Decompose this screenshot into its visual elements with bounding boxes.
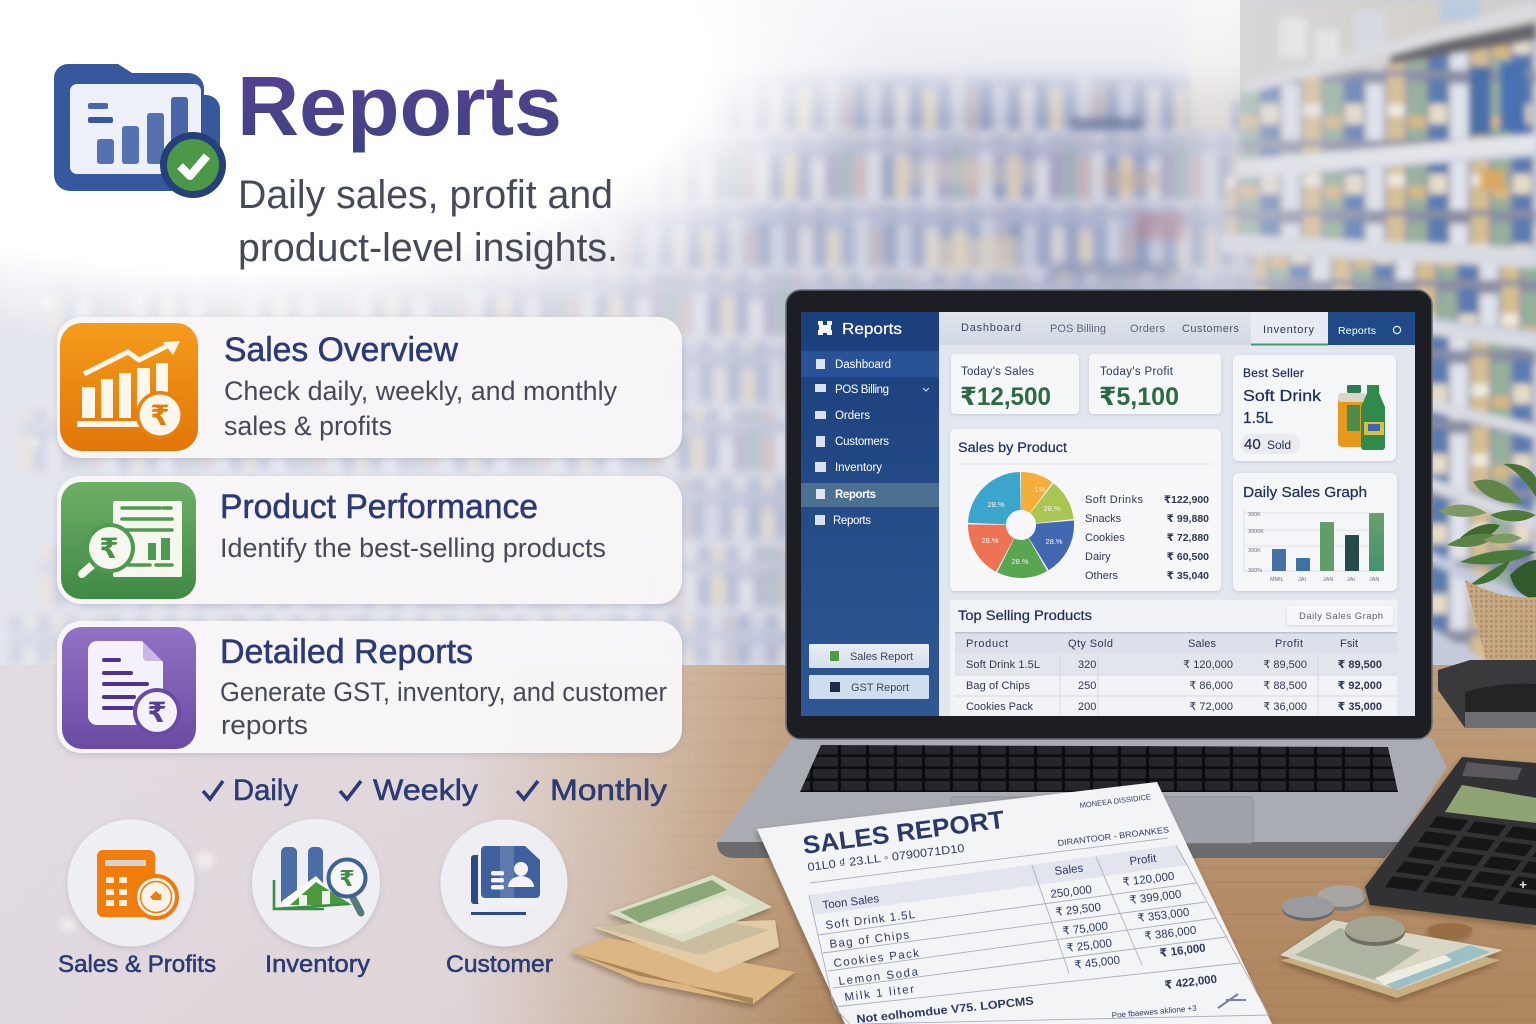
panel: product performance: Product Performance: [220, 488, 538, 526]
sidebar: Reports: [833, 515, 871, 527]
sales by product card: Soft Drinks: [1085, 494, 1144, 506]
sales report paper: Poe fbaewes aklione +3: [1111, 1004, 1198, 1020]
best seller card: Soft Drink: [1243, 388, 1321, 405]
top selling products table: ₹ 92,000: [1338, 680, 1382, 692]
daily sales graph card: 3000K: [1248, 529, 1264, 535]
top selling products table: ₹ 89,500: [1338, 659, 1382, 671]
panel: sales overview: [57, 317, 682, 458]
best seller card: Sold: [1267, 438, 1291, 452]
top selling products table: Daily Sales Graph: [1299, 611, 1383, 622]
banknotes right: [1280, 916, 1503, 998]
sales report paper: [757, 782, 1272, 1024]
panel: detailed reports: [57, 621, 682, 753]
sidebar: Inventory: [835, 462, 882, 474]
sales by product card: [950, 429, 1221, 591]
sales by product card: ₹ 60,500: [1167, 551, 1209, 563]
laptop base and keyboard: [717, 738, 1447, 858]
top navigation: Customers: [1182, 323, 1240, 335]
top selling products table: ₹ 120,000: [1183, 659, 1233, 671]
sales by product card: ₹ 35,040: [1167, 570, 1209, 582]
pie chart: 28.%: [1045, 537, 1063, 546]
subtitle: Daily sales, profit and: [238, 173, 613, 217]
sidebar: POS Billing: [835, 384, 889, 396]
sidebar: Orders: [835, 410, 870, 422]
top selling products table: Sales: [1188, 638, 1216, 650]
stat card: today's profit: ₹5,100: [1099, 383, 1179, 411]
sales by product card: Sales by Product: [958, 440, 1067, 455]
sales report paper: Profit: [1129, 853, 1158, 868]
sales report paper: Cookies Pack: [833, 948, 920, 970]
sales report paper: MONEEA DISSIDICE: [1079, 792, 1151, 810]
sales by product card: ₹122,900: [1164, 494, 1209, 506]
panel: detailed reports: reports: [221, 710, 308, 740]
panel: product performance: [57, 476, 682, 604]
calculator: +: [1519, 877, 1527, 892]
title: Reports: [237, 59, 562, 153]
sales report paper: Lemon Soda: [838, 966, 919, 988]
best seller card: [1233, 355, 1396, 461]
sales report paper: ₹ 16,000: [1159, 942, 1206, 960]
sales report paper: ₹ 386,000: [1144, 925, 1197, 943]
category: inventory: [252, 819, 380, 978]
pie chart: 28.%: [1043, 504, 1061, 513]
sales report paper: ₹ 45,000: [1074, 954, 1121, 972]
top selling products table: Qty Sold: [1068, 638, 1113, 650]
top selling products table: ₹ 72,000: [1189, 701, 1233, 713]
sales report paper: SALES REPORT: [801, 806, 1006, 860]
top selling products table: 320: [1078, 659, 1096, 671]
sales report paper: Milk 1 liter: [844, 984, 915, 1004]
banknotes left: [570, 875, 795, 1004]
stat card: today's sales: Today's Sales: [961, 366, 1034, 378]
potted plant: [1438, 464, 1536, 660]
category: customer: Customer: [446, 951, 553, 978]
sidebar: Reports: [842, 321, 902, 338]
coins: [1282, 885, 1366, 921]
top selling products table: Product: [966, 638, 1008, 650]
category: sales and profits: [58, 820, 216, 978]
pie chart: 1%: [1035, 485, 1046, 494]
period checklist: daily, weekly, monthly: Monthly: [550, 774, 667, 807]
top selling products table: ₹ 36,000: [1263, 701, 1307, 713]
sales report paper: ₹ 29,500: [1055, 901, 1102, 919]
period checklist: daily, weekly, monthly: Weekly: [373, 774, 478, 807]
top navigation: Orders: [1130, 323, 1166, 335]
sales report paper: ₹ 399,000: [1129, 889, 1182, 907]
pie chart: 28.%: [1011, 557, 1029, 566]
sidebar: [801, 312, 939, 716]
top selling products table: ₹ 86,000: [1189, 680, 1233, 692]
icon: document with rupee: ₹: [147, 697, 167, 728]
sales by product card: Dairy: [1085, 551, 1111, 563]
panel: detailed reports: Generate GST, inventory, and customer: [220, 677, 667, 707]
sales by product card: ₹ 99,880: [1167, 513, 1209, 525]
sales by product card: Snacks: [1085, 513, 1122, 525]
daily sales graph card: 300K: [1248, 512, 1261, 518]
sales report button: Sales Report: [850, 651, 913, 663]
sales report paper: Bag of Chips: [829, 929, 910, 951]
daily sales graph card: JAI: [1347, 577, 1355, 583]
sidebar: Dashboard: [835, 359, 891, 371]
sales report paper: Sales: [1054, 863, 1084, 878]
icon: report with magnifier and rupee: [61, 482, 196, 599]
category: inventory: ₹: [339, 866, 355, 891]
top selling products table: 200: [1078, 701, 1096, 713]
subtitle: product-level insights.: [238, 226, 618, 270]
daily sales graph card: 300K: [1248, 548, 1261, 554]
daily sales graph card: JAN: [1323, 577, 1333, 583]
sales by product card: ₹ 72,880: [1167, 532, 1209, 544]
top selling products table: Bag of Chips: [966, 680, 1030, 692]
icon: sales chart with rupee: [60, 323, 198, 451]
top navigation: [939, 312, 1415, 346]
sales report paper: ₹ 422,000: [1164, 974, 1218, 992]
sidebar: Customers: [835, 436, 889, 448]
top selling products table: Soft Drink 1.5L: [966, 659, 1040, 671]
subtitle: [238, 173, 618, 270]
daily sales graph card: JAN: [1369, 577, 1379, 583]
category: inventory: Inventory: [265, 951, 370, 978]
sales by product card: Cookies: [1085, 532, 1125, 544]
panel: sales overview: sales & profits: [224, 411, 392, 441]
top selling products table: Profit: [1275, 638, 1303, 650]
sales report paper: Toon Sales: [822, 893, 880, 912]
sales by product card: Others: [1085, 570, 1119, 582]
top navigation: Reports: [1338, 325, 1376, 337]
daily sales graph card: 300%: [1248, 568, 1262, 574]
pie chart: [981, 485, 1063, 566]
sales report paper: DIRANTOOR - BROANKES: [1057, 824, 1170, 848]
icon: report with magnifier and rupee: ₹: [99, 533, 119, 564]
icon: soft drink bottles: [1338, 385, 1385, 450]
top selling products table: ₹ 88,500: [1263, 680, 1307, 692]
stat card: today's profit: Today's Profit: [1100, 366, 1174, 378]
panel: product performance: Identify the best-selling products: [220, 533, 606, 563]
stat card: today's sales: [951, 354, 1079, 414]
panel: detailed reports: Detailed Reports: [220, 633, 473, 671]
sales report paper: ₹ 120,000: [1122, 871, 1175, 889]
top selling products table: Fsit: [1340, 638, 1358, 650]
sales report paper: ₹ 25,000: [1066, 937, 1113, 955]
sales report paper: ₹ 353,000: [1137, 907, 1190, 925]
sales report paper: 01L0 ₫ 23.LL ◦ 0790071D10: [807, 843, 965, 874]
best seller card: 40: [1244, 436, 1261, 453]
daily sales graph card: MMIL: [1270, 577, 1284, 583]
best seller card: 1.5L: [1243, 410, 1274, 427]
GST report button: GST Report: [851, 682, 909, 694]
top selling products table: [950, 600, 1397, 716]
sales report paper: ₹ 75,000: [1062, 920, 1109, 938]
calculator: [1365, 757, 1536, 925]
top navigation: POS Billing: [1050, 323, 1106, 335]
top selling products table: Top Selling Products: [958, 608, 1092, 623]
stat card: today's sales: ₹12,500: [960, 383, 1051, 411]
panel: sales overview: Check daily, weekly, and monthly: [224, 376, 617, 406]
laptop screen frame: [786, 290, 1432, 739]
best seller card: Best Seller: [1243, 366, 1304, 380]
daily sales graph card: Daily Sales Graph: [1243, 485, 1367, 501]
category: customer: [440, 820, 568, 978]
pie chart: 28.%: [981, 536, 999, 545]
sales report paper: Soft Drink 1.5L: [825, 909, 916, 932]
GST report button: [809, 675, 929, 699]
sidebar: Reports: [835, 489, 876, 501]
top selling products table: Cookies Pack: [966, 701, 1034, 713]
top navigation: Inventory: [1263, 324, 1314, 336]
pie chart: 28.%: [987, 500, 1005, 509]
panel: sales overview: Sales Overview: [224, 331, 458, 369]
period checklist: daily, weekly, monthly: [203, 774, 667, 807]
stat card: today's profit: [1089, 354, 1221, 414]
laptop screen: reports dashboard: [801, 312, 1415, 716]
daily sales graph card: [1233, 473, 1397, 591]
category: sales and profits: Sales & Profits: [58, 951, 216, 978]
period checklist: daily, weekly, monthly: Daily: [233, 774, 298, 807]
top selling products table: ₹ 89,500: [1263, 659, 1307, 671]
icon: document with rupee: [62, 627, 196, 749]
daily sales graph card: JAI: [1298, 577, 1306, 583]
sales report paper: 250,000: [1050, 884, 1093, 901]
logo icon: report folder with check badge: [54, 64, 226, 198]
top selling products table: ₹ 35,000: [1338, 701, 1382, 713]
top navigation: Dashboard: [961, 322, 1021, 334]
icon: sales chart with rupee: ₹: [150, 400, 170, 431]
wallet: [1438, 660, 1536, 728]
top selling products table: 250: [1078, 680, 1096, 692]
sales report button: [809, 644, 929, 668]
